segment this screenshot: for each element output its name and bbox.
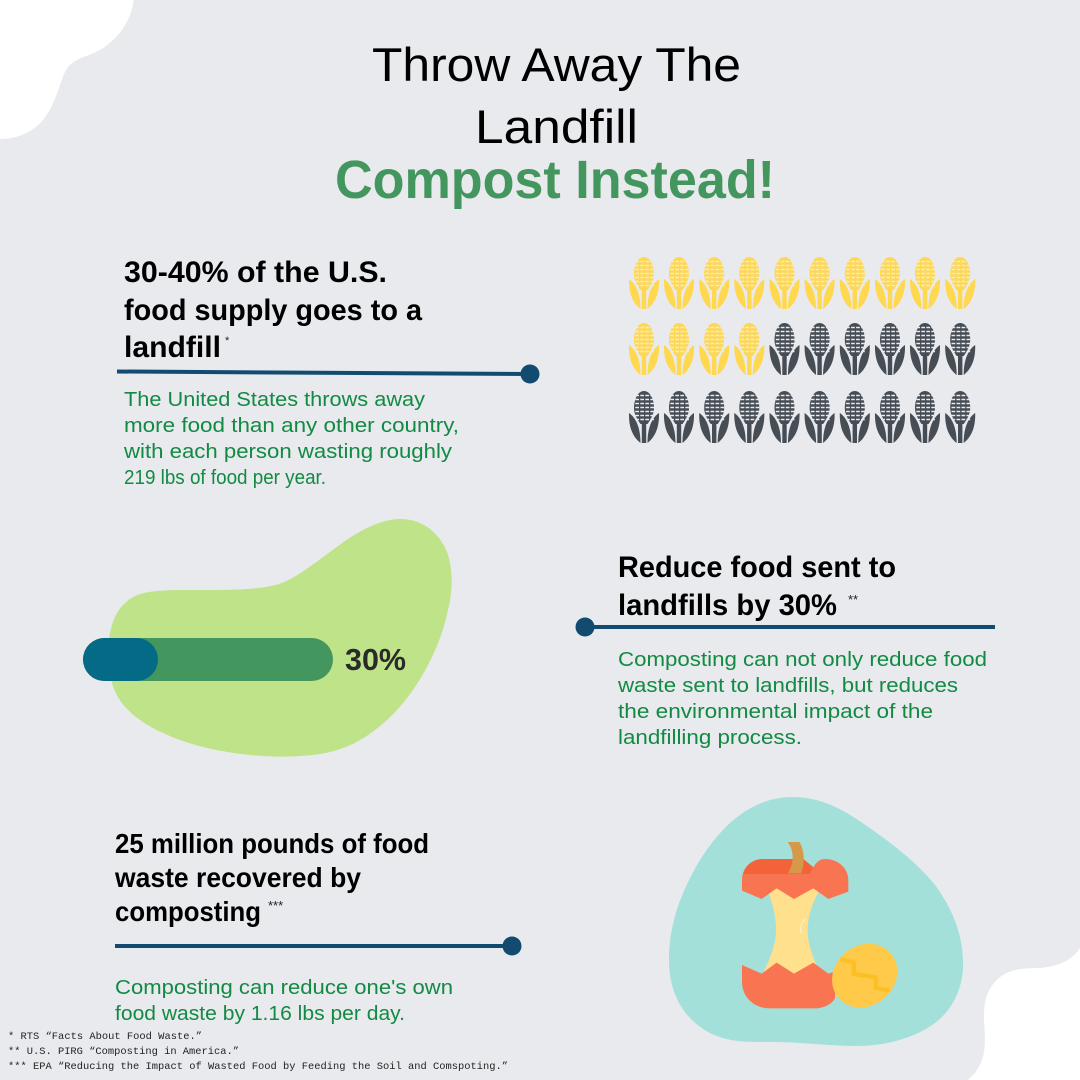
icon: apple core and seed [742,842,910,1021]
heading: reduce food: ** [848,592,858,607]
apple bottom [742,963,835,1008]
body text: food supply: 219 lbs of food per year. [124,467,326,489]
heading: 25 million pounds: 25 million pounds of food [115,828,429,859]
divider with dot [115,936,522,956]
heading: 25 million pounds: waste recovered by [114,862,361,893]
heading: food supply: * [225,335,230,347]
body text: reduce food [617,649,987,749]
panel: reduce food [576,551,995,749]
footnotes: *** EPA “Reducing the Impact of Wasted Food by Feeding the Soil and Comspoting.” [8,1061,508,1073]
heading: 25 million pounds: *** [268,898,283,913]
body text: food supply: The United States throws away [124,389,425,411]
white blob: top left [0,0,134,139]
green blob [108,519,452,757]
panel: 25 million pounds [114,828,522,1025]
heading: 25 million pounds: composting [115,896,261,927]
heading: food supply: landfill [124,331,221,364]
divider with dot [117,364,540,384]
heading: reduce food: Reduce food sent to [618,551,896,584]
seed [819,931,910,1021]
heading: food supply: 30-40% of the U.S. [124,256,387,289]
body text: 25 million pounds: Composting can reduce one's own [115,977,453,999]
body text: reduce food: Composting can not only reduce food [618,649,987,671]
footnotes [8,1031,508,1073]
heading: 25 million pounds [114,828,429,927]
heading: reduce food [618,551,896,622]
body text: food supply: more food than any other country, [124,415,459,437]
heading: reduce food: landfills by 30% [618,589,837,622]
body text: reduce food: landfilling process. [618,727,802,749]
title: Compost Instead! [335,150,775,210]
title: Throw Away The [372,38,741,91]
apple stem [788,842,804,873]
white blob: bottom right [968,948,1080,1080]
heading: food supply [124,256,422,364]
title: Landfill [475,100,638,153]
teal blob [669,797,963,1046]
apple top [742,859,848,899]
progress bar: 30% [83,638,406,681]
body text: 25 million pounds [115,977,453,1025]
body text: food supply: with each person wasting roughly [123,441,452,463]
panel: food supply [117,256,540,489]
title [335,38,775,210]
body text: 25 million pounds: food waste by 1.16 lbs per day. [115,1003,405,1025]
body text: reduce food: the environmental impact of the [618,701,933,723]
footnotes: ** U.S. PIRG “Composting in America.” [8,1046,239,1058]
progress bar: 30%: 30% [345,642,406,677]
divider with dot [576,618,995,636]
apple flesh [762,887,822,977]
heading: food supply: food supply goes to a [124,294,422,327]
footnotes: * RTS “Facts About Food Waste.” [8,1031,202,1043]
pictogram: corn 14 of 30 highlighted [629,257,975,443]
body text: food supply [123,389,459,489]
body text: reduce food: waste sent to landfills, but reduces [617,675,958,697]
